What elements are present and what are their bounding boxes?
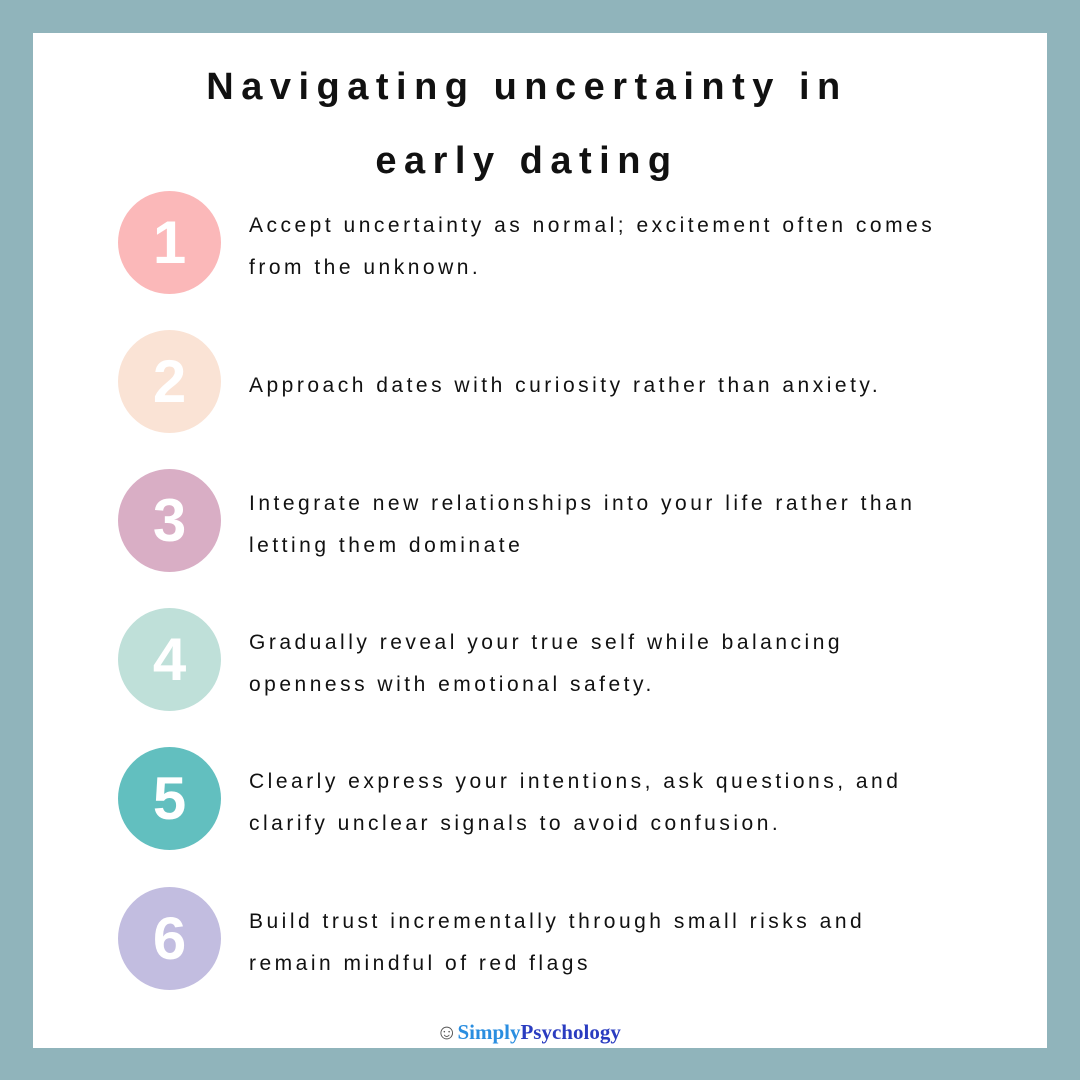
item 6 [118,887,865,990]
item 1 [118,191,935,294]
item 5: Clearly express your intentions, ask questions, and [249,770,901,793]
item 2 [118,330,881,433]
item 3: letting them dominate [249,534,523,557]
item 4: 4 [153,626,186,693]
item 5 [118,747,901,850]
item 5: clarify unclear signals to avoid confusion. [249,812,781,835]
logo: SimplyPsychology: ☺SimplyPsychology [436,1020,621,1044]
item 3 [118,469,915,572]
item 4: Gradually reveal your true self while balancing [249,631,843,654]
item 4: openness with emotional safety. [249,673,655,696]
item 2: 2 [153,348,186,415]
item 6: Build trust incrementally through small risks and [249,910,865,933]
item 2: Approach dates with curiosity rather than anxiety. [249,374,881,397]
item 1: from the unknown. [249,256,481,279]
item 1: Accept uncertainty as normal; excitement often comes [249,214,935,237]
item 6: remain mindful of red flags [249,952,591,975]
title line 2: early dating [375,140,679,182]
item 1: 1 [153,209,186,276]
item 4 [118,608,843,711]
item 6: 6 [153,905,186,972]
title line 1: Navigating uncertainty in [206,66,848,108]
item 3: 3 [153,487,186,554]
item 5: 5 [153,765,186,832]
item 3: Integrate new relationships into your life rather than [249,492,915,515]
